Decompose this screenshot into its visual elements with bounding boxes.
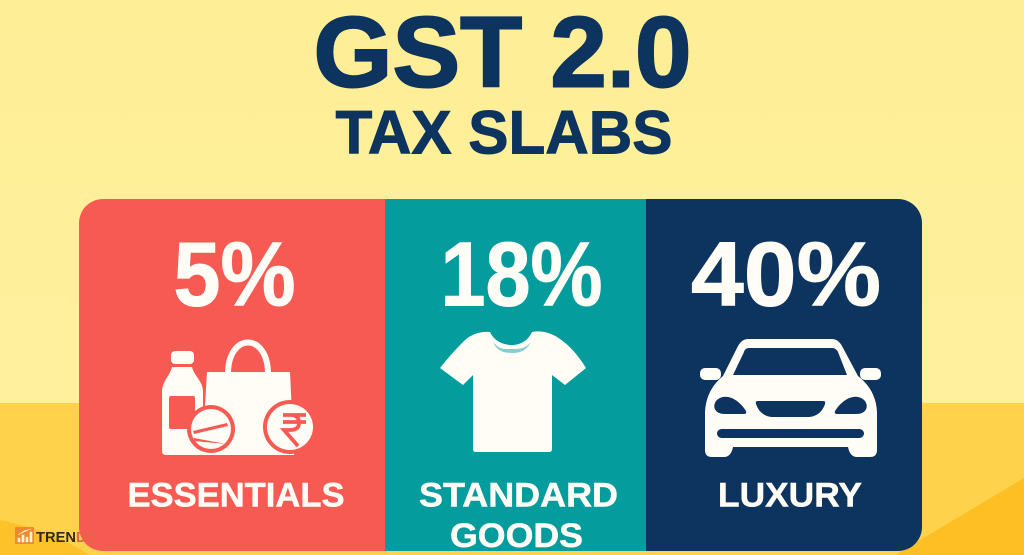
icon: logo chart xyxy=(15,527,34,544)
logo text: TREN xyxy=(36,529,76,546)
panel backgrounds xyxy=(79,199,922,551)
icon: bottle, bag, tablet and rupee coin xyxy=(162,342,317,455)
logo: Trendz watermark xyxy=(15,527,95,546)
panel: standard goods xyxy=(419,224,618,555)
label: standard goods xyxy=(419,476,618,555)
logo: Trendz watermark: DZ xyxy=(76,529,95,546)
panel group: tax slabs xyxy=(79,199,922,555)
subheading: Tax Slabs: TAX SLABS xyxy=(336,98,672,166)
label: luxury: LUXURY xyxy=(718,476,862,514)
title xyxy=(314,0,692,166)
icon: t-shirt xyxy=(440,331,586,452)
label: standard goods: STANDARD xyxy=(419,476,618,514)
rate: 18%: 18% xyxy=(440,224,602,326)
label: standard goods: GOODS xyxy=(450,517,583,555)
icon: car xyxy=(700,339,881,457)
rate: 5%: 5% xyxy=(174,224,296,326)
panel: essentials xyxy=(128,224,344,514)
panel: luxury xyxy=(691,224,881,514)
rate: 40%: 40% xyxy=(691,224,881,326)
label: essentials: ESSENTIALS xyxy=(128,476,344,514)
